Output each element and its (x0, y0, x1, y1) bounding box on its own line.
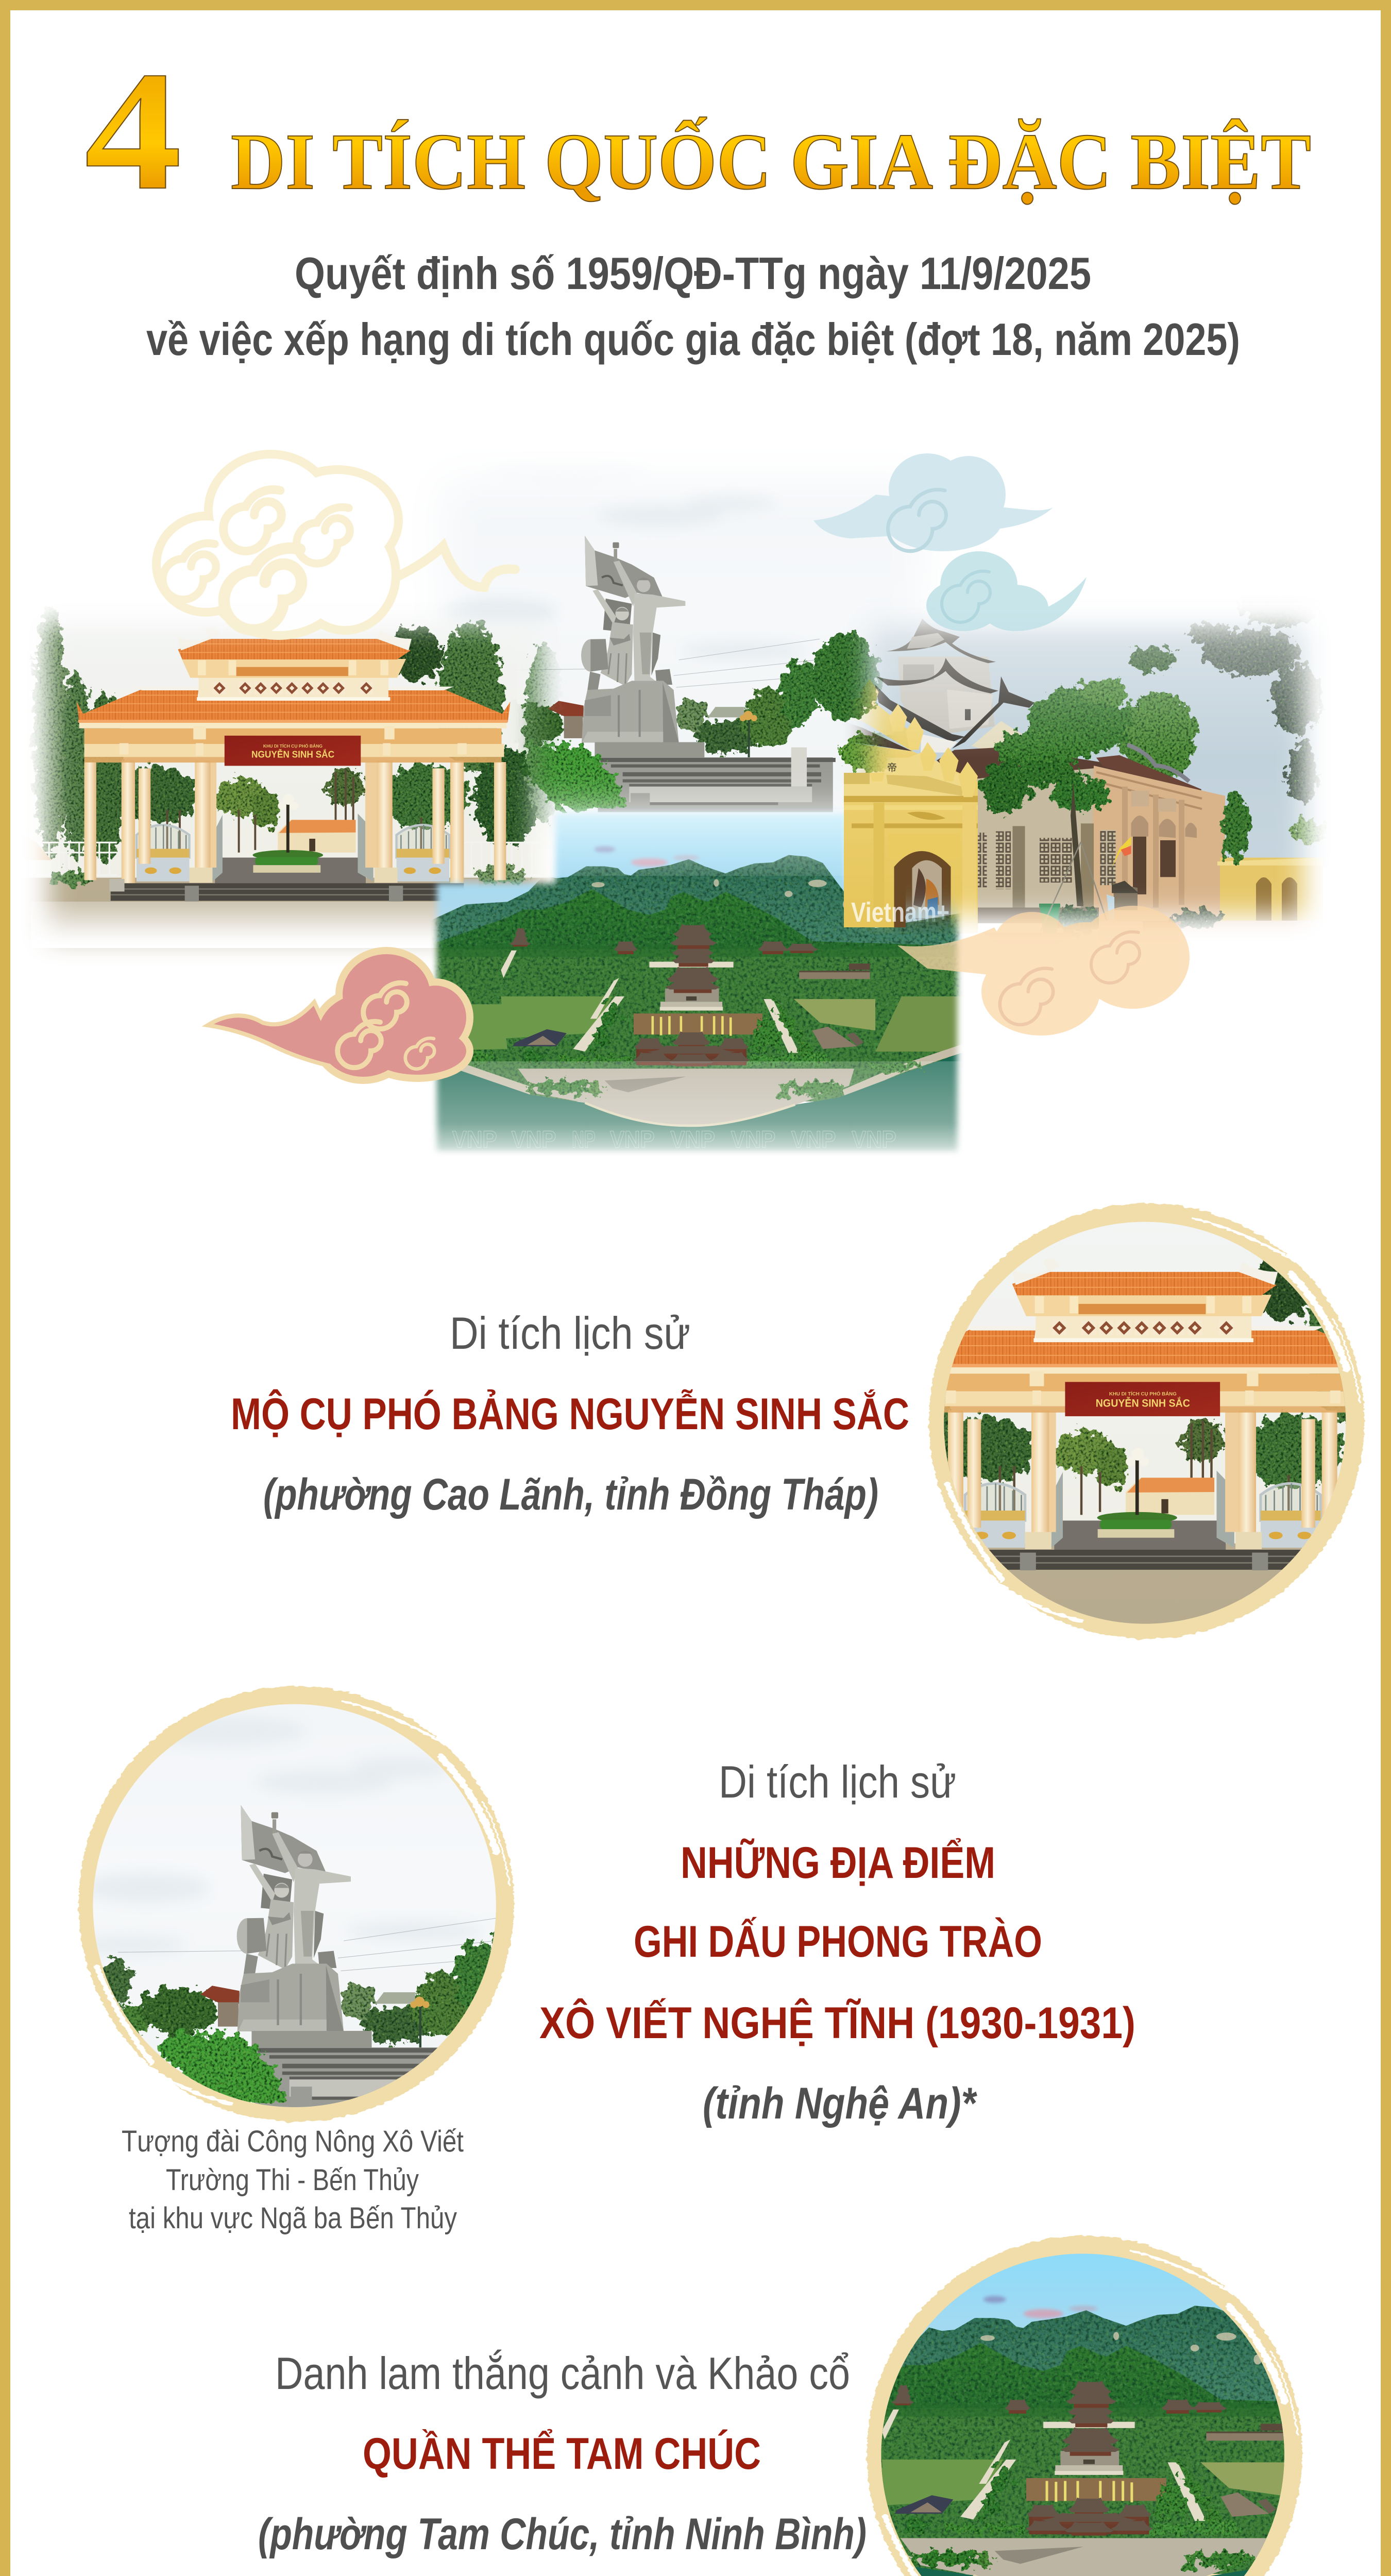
photo caption: Tượng đài Công Nông Xô Viết (122, 2125, 464, 2158)
text block: Xo Viet Nghe Tinh: NHỮNG ĐỊA ĐIỂM (681, 1838, 995, 1888)
photo circle: Tam Chuc complex (866, 2234, 1303, 2576)
text block: Tam Chuc (258, 2348, 867, 2559)
text block: Nguyen Sinh Sac: MỘ CỤ PHÓ BẢNG NGUYỄN SINH SẮC (231, 1389, 909, 1439)
text block: Tam Chuc: (phường Tam Chúc, tỉnh Ninh Bình) (258, 2510, 867, 2559)
hero collage: four heritage sites with clouds (29, 450, 1325, 1154)
photo caption: tại khu vực Ngã ba Bến Thủy (129, 2201, 457, 2235)
cloud: peach (897, 906, 1190, 1036)
hero photo: Tam Chuc complex (432, 808, 962, 1154)
subtitle (146, 248, 1240, 365)
photo caption (122, 2125, 464, 2235)
title (84, 36, 1311, 225)
hero photo: Nguyen Sinh Sac gate (29, 606, 560, 955)
text block: Xo Viet Nghe Tinh: XÔ VIẾT NGHỆ TĨNH (1930-1931) (539, 1998, 1135, 2048)
title: 4 (84, 36, 182, 225)
cloud: blue upper (813, 453, 1053, 551)
photo circle: Nguyen Sinh Sac gate (927, 1202, 1365, 1640)
text block: Nguyen Sinh Sac: Di tích lịch sử (450, 1308, 690, 1359)
text block: Xo Viet Nghe Tinh: GHI DẤU PHONG TRÀO (634, 1917, 1042, 1967)
cloud: red (208, 954, 466, 1077)
subtitle: Quyết định số 1959/QĐ-TTg ngày 11/9/2025 (295, 248, 1091, 299)
photo caption: Trường Thi - Bến Thủy (166, 2163, 419, 2197)
text block: Xo Viet Nghe Tinh: Di tích lịch sử (719, 1756, 956, 1807)
cloud: cream outline (161, 459, 515, 631)
cloud: blue lower (926, 551, 1087, 631)
hero photo: Co Le pagoda (746, 500, 1364, 963)
photo circle: Cong Nong Xo Viet statue (77, 1685, 515, 2124)
hero photo: statue (446, 487, 907, 816)
text block: Tam Chuc: Danh lam thắng cảnh và Khảo cổ (275, 2348, 850, 2399)
title: DI TÍCH QUỐC GIA ĐẶC BIỆT (231, 116, 1311, 206)
text block: Xo Viet Nghe Tinh (539, 1756, 1135, 2128)
text block: Nguyen Sinh Sac (231, 1308, 909, 1519)
text block: Xo Viet Nghe Tinh: (tỉnh Nghệ An)* (703, 2079, 977, 2128)
text block: Nguyen Sinh Sac: (phường Cao Lãnh, tỉnh Đồng Tháp) (263, 1470, 878, 1519)
text block: Tam Chuc: QUẦN THỂ TAM CHÚC (363, 2429, 761, 2479)
